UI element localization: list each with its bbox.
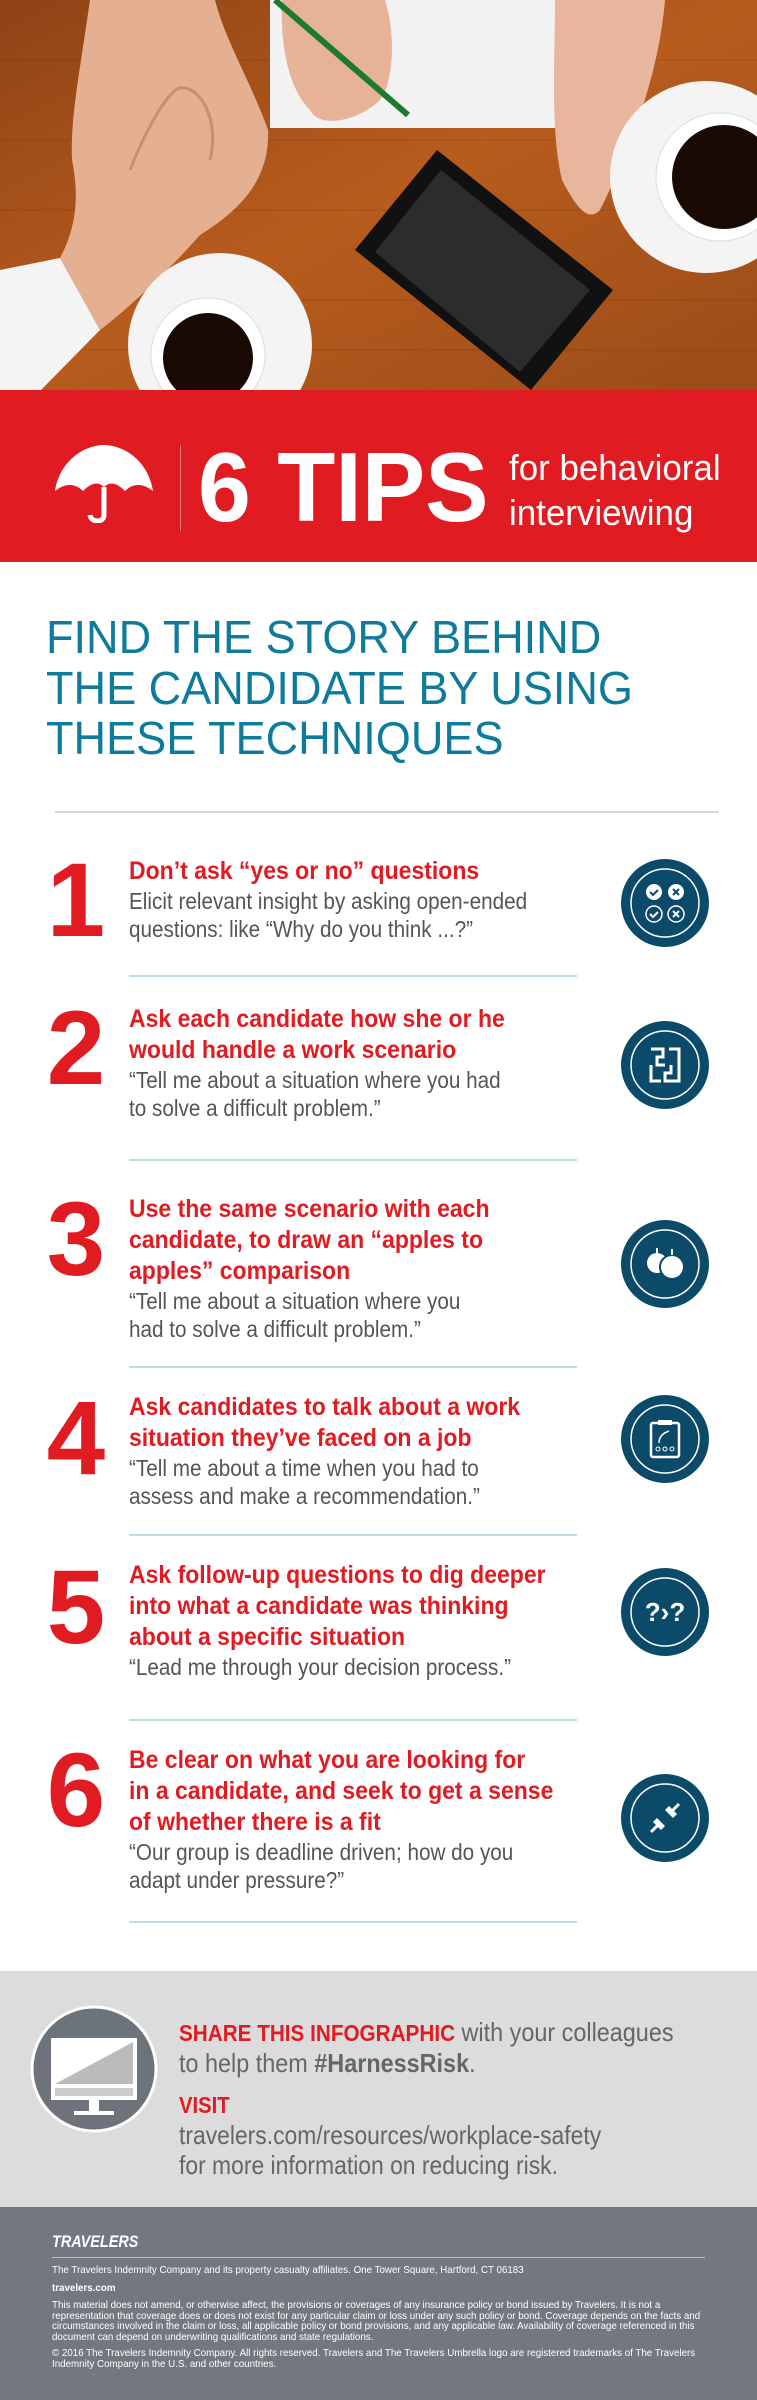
subtitle: for behavioral — [509, 447, 721, 488]
tip 5: 5 — [47, 1549, 105, 1666]
text: assess and make a recommendation.” — [129, 1483, 480, 1509]
footer text: © 2016 The Travelers Indemnity Company. All rights reserved. Travelers and The Travelers Umbrella logo are registered trademarks of The Travelers Indemnity Company in the U.S. and other countries. — [52, 2347, 695, 2370]
footer text: This material does not amend, or otherwise affect, the provisions or coverages of any insurance policy or bond issued by Travelers. It is not a representation that coverage does or does not exist for any particular claim or loss under any such policy or bond. Coverage depends on the facts and circumstances involved in the claim or loss, all applicable policy or bond provisions, and any applicable law. Availability of coverage referenced in this document can depend on underwriting qualifications and state regulations. — [52, 2299, 700, 2342]
tip 6: 6 — [47, 1732, 105, 1849]
icon: question marks: ?›? — [645, 1597, 685, 1627]
tip 2: 2 — [47, 990, 105, 1107]
text: questions: like “Why do you think ...?” — [129, 916, 473, 942]
text: Elicit relevant insight by asking open-ended — [129, 888, 527, 914]
heading — [46, 611, 633, 764]
heading: THE CANDIDATE BY USING — [46, 662, 633, 714]
text: adapt under pressure?” — [129, 1867, 344, 1893]
heading: THESE TECHNIQUES — [46, 712, 504, 764]
photo: desk with hands, coffee and tablet — [0, 0, 757, 390]
share panel — [0, 1971, 757, 2207]
header band — [0, 390, 757, 562]
text: Ask each candidate how she or he — [129, 1005, 505, 1033]
visit text: for more information on reducing risk. — [179, 2150, 558, 2180]
text: “Tell me about a situation where you had — [129, 1067, 501, 1093]
text: Ask candidates to talk about a work — [129, 1393, 520, 1421]
logo: TRAVELERS — [52, 2232, 138, 2251]
footer text — [52, 2264, 700, 2370]
text: would handle a work scenario — [129, 1036, 456, 1064]
title: 6 TIPS: 6 TIPS — [198, 432, 489, 542]
icon: umbrella — [55, 445, 153, 523]
text: Be clear on what you are looking for — [129, 1746, 525, 1774]
subtitle: interviewing — [509, 492, 693, 533]
icon: apples — [621, 1220, 709, 1308]
visit text: travelers.com/resources/workplace-safety — [179, 2120, 601, 2150]
text: candidate, to draw an “apples to — [129, 1226, 483, 1254]
text: situation they’ve faced on a job — [129, 1424, 472, 1452]
text: in a candidate, and seek to get a sense — [129, 1777, 553, 1805]
text: “Tell me about a time when you had to — [129, 1455, 479, 1481]
text: “Tell me about a situation where you — [129, 1288, 460, 1314]
text: about a specific situation — [129, 1623, 405, 1651]
icon: maze — [621, 1021, 709, 1109]
footer text: The Travelers Indemnity Company and its property casualty affiliates. One Tower Square, Hartford, CT 06183 — [52, 2264, 524, 2276]
text: Don’t ask “yes or no” questions — [129, 857, 479, 885]
tip 4: 4 — [47, 1380, 105, 1497]
text: Use the same scenario with each — [129, 1195, 489, 1223]
icon: plug — [621, 1774, 709, 1862]
icon: question marks — [621, 1568, 709, 1656]
footer — [0, 2207, 757, 2400]
text: Ask follow-up questions to dig deeper — [129, 1561, 546, 1589]
text: apples” comparison — [129, 1257, 350, 1285]
text: to solve a difficult problem.” — [129, 1095, 381, 1121]
text: “Our group is deadline driven; how do you — [129, 1839, 513, 1865]
text: “Lead me through your decision process.” — [129, 1654, 511, 1680]
icon: check/cross — [621, 859, 709, 947]
text: of whether there is a fit — [129, 1808, 381, 1836]
share text: SHARE THIS INFOGRAPHIC with your colleagues — [179, 2017, 674, 2047]
footer text: travelers.com — [52, 2282, 116, 2294]
tip 3: 3 — [47, 1181, 105, 1298]
icon: monitor — [30, 2006, 158, 2132]
share text — [179, 2017, 674, 2078]
text: had to solve a difficult problem.” — [129, 1316, 421, 1342]
text: into what a candidate was thinking — [129, 1592, 509, 1620]
tip 1: 1 — [47, 842, 105, 959]
visit text — [179, 2092, 602, 2180]
subtitle — [509, 447, 721, 533]
visit text: VISIT — [179, 2092, 230, 2118]
heading: FIND THE STORY BEHIND — [46, 611, 601, 663]
icon: clipboard — [621, 1395, 709, 1483]
share text: to help them #HarnessRisk. — [179, 2048, 476, 2078]
